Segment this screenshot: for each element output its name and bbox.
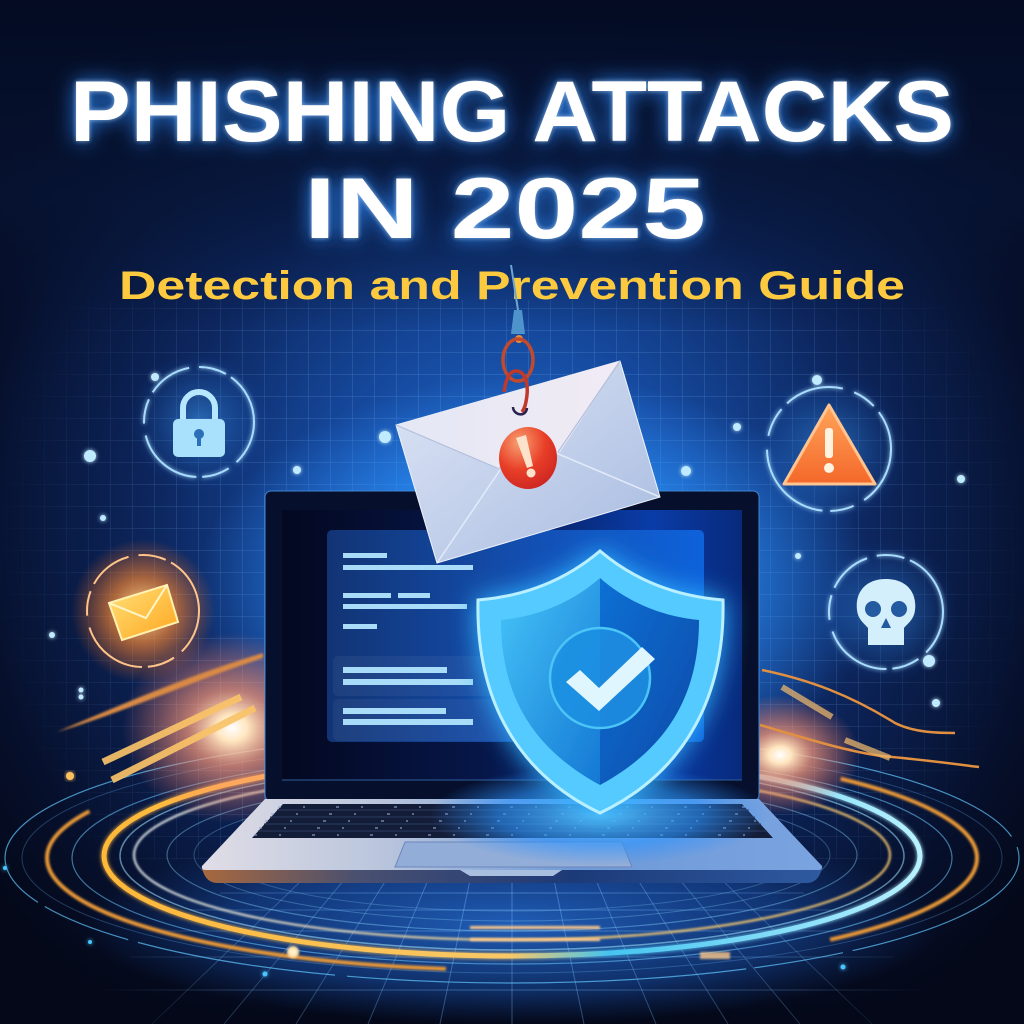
glowing particles [3, 373, 965, 976]
title [70, 64, 954, 257]
hook line [511, 265, 525, 343]
laptop [202, 491, 822, 883]
shield under-glow [430, 765, 770, 865]
icon: glowing mail [71, 539, 215, 683]
keyboard [252, 804, 773, 838]
screen text lines [343, 553, 473, 725]
envelope [396, 361, 660, 563]
glow behind laptop [195, 375, 875, 805]
laptop base [202, 799, 822, 883]
icon: skull [814, 540, 958, 684]
bottom light dashes [287, 926, 730, 959]
title: PHISHING ATTACKS [70, 64, 954, 160]
title: IN 2025 [304, 161, 706, 257]
icon: check mark [566, 647, 655, 711]
shield [478, 551, 723, 813]
light streaks left [57, 633, 342, 823]
alert badge [499, 427, 557, 489]
envelope with hook [396, 265, 660, 563]
subtitle: Detection and Prevention Guide [119, 264, 905, 308]
floor perspective grid [100, 880, 924, 1024]
icon: warning triangle [751, 371, 907, 527]
concentric rings [5, 733, 1019, 983]
icon: padlock [129, 352, 269, 492]
trackpad [395, 842, 632, 867]
light streaks right [700, 670, 979, 815]
hook [503, 339, 533, 414]
floor glow [82, 825, 942, 1024]
laptop screen [265, 491, 759, 801]
